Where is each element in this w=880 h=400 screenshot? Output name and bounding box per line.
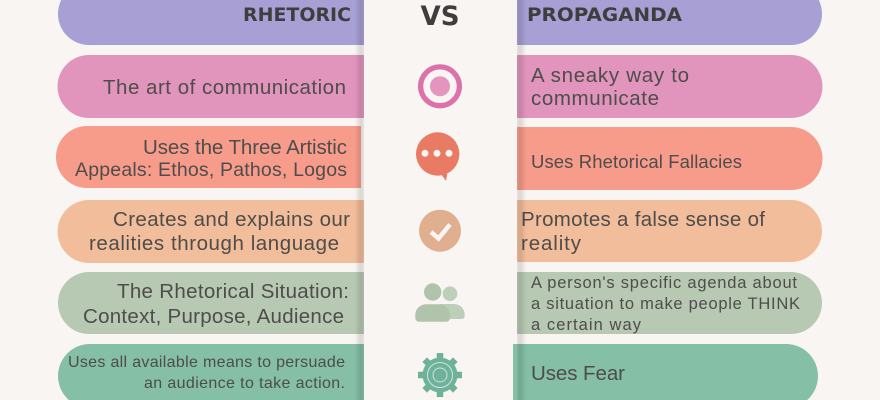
row 4 right: A person's specific agenda about	[531, 274, 797, 292]
row 5 left: an audience to take action.	[144, 375, 345, 392]
row 4 right: a situation to make people THINK	[531, 295, 800, 313]
row 1 left: The art of communication	[103, 76, 346, 99]
row 2 left: Uses the Three Artistic	[143, 136, 347, 159]
row 3 left: Creates and explains our	[113, 208, 350, 231]
icon: people	[415, 283, 465, 322]
row 4 left: The Rhetorical Situation:	[117, 280, 349, 303]
icon: gear	[418, 353, 462, 397]
row 5 left	[58, 344, 364, 400]
row 4 right	[517, 272, 822, 334]
row 1 left	[58, 55, 364, 118]
header bar: rhetoric	[58, 0, 364, 45]
row 2 right: Uses Rhetorical Fallacies	[531, 151, 742, 172]
panel: propaganda column	[513, 0, 823, 400]
icon: speech bubble	[416, 132, 459, 181]
row 3 right	[517, 200, 822, 262]
row 3 right: Promotes a false sense of	[521, 208, 765, 231]
row 3 left	[58, 200, 364, 263]
heading: VS: VS	[420, 1, 460, 32]
row 5 right: Uses Fear	[531, 362, 625, 385]
row 3 left: realities through language	[89, 232, 339, 255]
row 4 left	[58, 272, 364, 334]
header bar: propaganda: PROPAGANDA	[527, 5, 683, 26]
icon: check mark	[419, 210, 461, 252]
row 4 right: a certain way	[531, 316, 642, 334]
row 3 right: reality	[521, 232, 582, 255]
row 1 right	[517, 55, 823, 118]
row 4 left: Context, Purpose, Audience	[83, 305, 344, 328]
row 2 right	[517, 127, 823, 190]
row 2 left	[56, 126, 361, 188]
row 5 right	[513, 344, 818, 400]
row 1 right: communicate	[531, 87, 659, 110]
header bar: rhetoric: RHETORIC	[243, 5, 351, 26]
row 5 left: Uses all available means to persuade	[68, 354, 345, 371]
row 2 left: Appeals: Ethos, Pathos, Logos	[75, 159, 347, 181]
panel: centre column	[364, 0, 517, 400]
header bar: propaganda	[517, 0, 822, 45]
panel: rhetoric column	[56, 0, 364, 400]
icon: target	[421, 67, 459, 106]
row 1 right: A sneaky way to	[531, 64, 689, 87]
